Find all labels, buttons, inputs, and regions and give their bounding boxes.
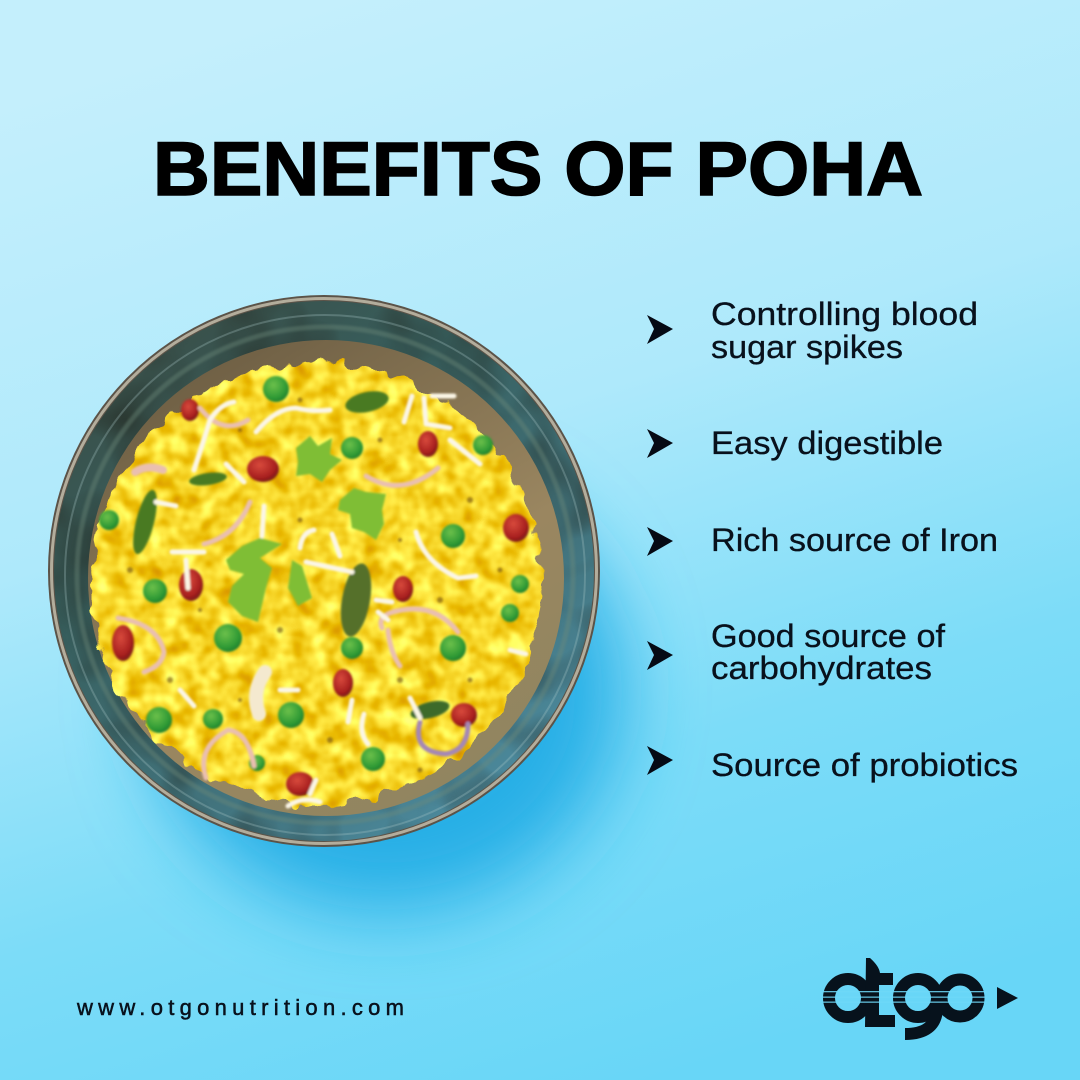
item: easy digestible <box>647 425 943 461</box>
item: controlling blood sugar spikes: sugar spikes <box>711 329 903 365</box>
logo arrow <box>997 987 1018 1009</box>
arrow <box>647 527 673 556</box>
green peas <box>99 376 529 771</box>
item: good source of carbohydrates <box>647 618 945 686</box>
bowl rim <box>48 295 600 847</box>
label: Source of probiotics <box>711 747 1018 783</box>
logo: otgo <box>823 958 1018 1034</box>
title: BENEFITS OF POHA <box>153 127 923 212</box>
item: good source of carbohydrates: carbohydrates <box>711 650 932 686</box>
rice flakes <box>92 362 542 804</box>
arrow <box>647 746 673 775</box>
label: Easy digestible <box>711 425 943 461</box>
benefits list <box>647 296 1018 783</box>
item: source of probiotics <box>647 746 1018 783</box>
red onion slices <box>118 408 468 778</box>
label: Good source of <box>711 618 945 654</box>
coconut shreds <box>156 396 526 806</box>
arrow <box>647 429 673 458</box>
arrow <box>647 641 673 670</box>
cilantro <box>226 436 386 622</box>
item: rich source of iron <box>647 522 998 558</box>
bowl shadow <box>147 468 623 912</box>
website url: www.otgonutrition.com <box>76 995 404 1020</box>
label: Rich source of Iron <box>711 522 998 558</box>
item: controlling blood sugar spikes <box>647 296 978 365</box>
toppings <box>99 376 529 806</box>
curry leaves and chillies <box>128 388 451 723</box>
arrow <box>647 315 673 344</box>
label: Controlling blood <box>711 296 978 332</box>
peanuts <box>112 399 529 796</box>
panel: bowl of poha <box>48 295 600 847</box>
dark specks between flakes <box>127 398 502 772</box>
